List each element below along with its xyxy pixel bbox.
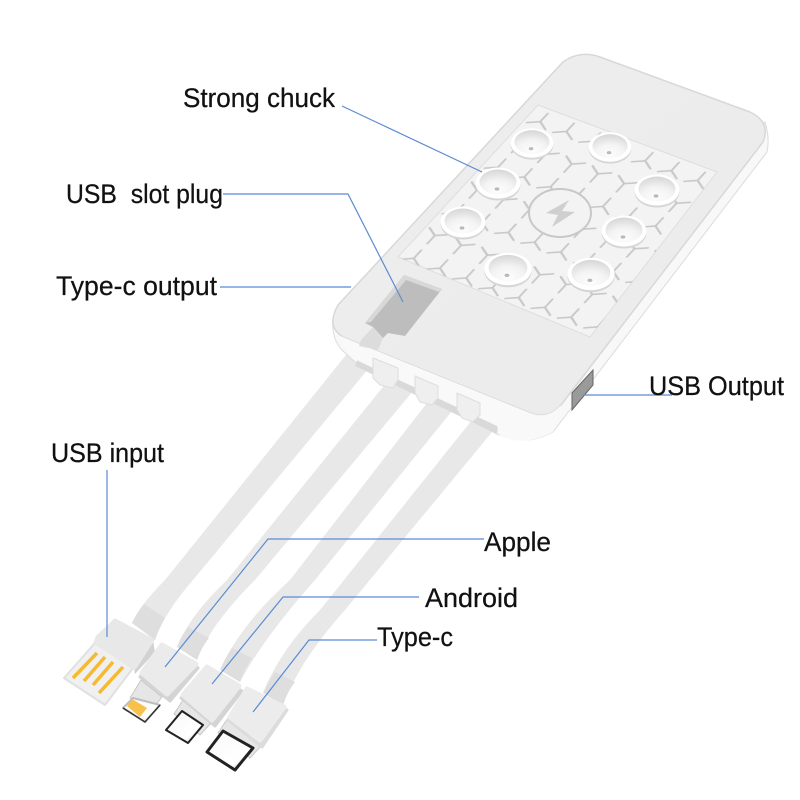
suction cups bbox=[440, 128, 680, 292]
cables: four flat ribbons bbox=[132, 350, 502, 705]
USB output port bbox=[572, 370, 593, 410]
label: Apple: Apple bbox=[484, 527, 551, 557]
label: USB input: USB input bbox=[51, 438, 164, 468]
USB slot bbox=[359, 275, 442, 350]
label: Type-c output: Type-c output bbox=[56, 271, 217, 301]
wireless charging symbol bbox=[529, 189, 591, 237]
front edge with port blocks bbox=[338, 335, 561, 441]
Micro USB connector bbox=[166, 667, 242, 743]
label: Android: Android bbox=[425, 583, 518, 613]
leader lines bbox=[107, 106, 672, 712]
Type-C connector bbox=[207, 689, 287, 770]
label: Strong chuck: Strong chuck bbox=[183, 83, 335, 113]
Lightning connector bbox=[123, 645, 198, 722]
gold contacts bbox=[73, 653, 123, 693]
power bank body bbox=[333, 54, 768, 441]
label: USB Output: USB Output bbox=[649, 371, 784, 401]
suction pad bbox=[398, 105, 717, 337]
USB-A connector bbox=[64, 620, 155, 705]
label: Type-c: Type-c bbox=[377, 622, 453, 652]
label: USB slot plug: USB slot plug bbox=[66, 179, 223, 209]
